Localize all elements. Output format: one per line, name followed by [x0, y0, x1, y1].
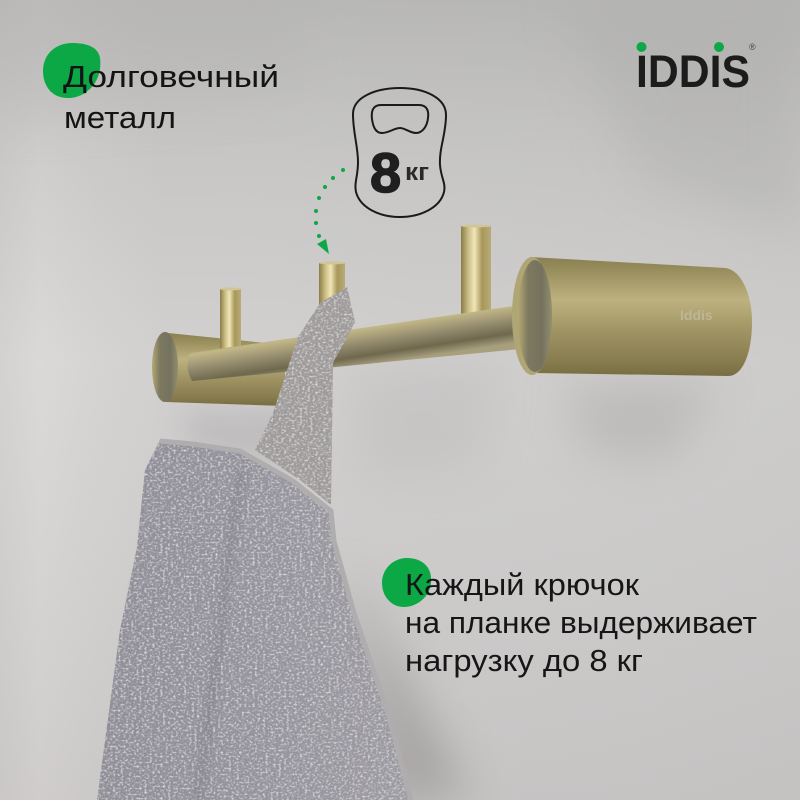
left wall mount	[152, 332, 285, 406]
towel	[97, 287, 411, 800]
towel loop strip	[255, 287, 355, 505]
logo: IDDIS: ®	[749, 42, 756, 52]
right hook peg	[461, 224, 491, 322]
right wall mount	[512, 257, 752, 376]
logo: IDDIS: IDDIS	[636, 46, 750, 97]
arrow: dotted curve to hook	[314, 168, 345, 254]
heading: durable metal: Долговечный	[63, 59, 279, 94]
heading: durable metal	[43, 43, 279, 135]
heading: durable metal: металл	[64, 100, 176, 135]
terry towel body	[97, 440, 410, 800]
horizontal bar	[187, 305, 520, 381]
green blob	[382, 558, 431, 607]
icon: kettlebell 8 kg: 8	[370, 141, 401, 204]
towel fold	[198, 470, 243, 800]
callout: load per hook	[382, 558, 757, 678]
callout: load per hook: нагрузку до 8 кг	[405, 643, 643, 678]
green blob	[43, 43, 100, 98]
hook rail	[152, 224, 752, 406]
callout: load per hook: на планке выдерживает	[405, 605, 757, 640]
icon: kettlebell 8 kg: кг	[405, 159, 429, 186]
engraved brand mark: Iddis	[680, 307, 713, 323]
callout: load per hook: Каждый крючок	[405, 567, 639, 602]
middle hook peg	[319, 262, 345, 313]
icon: kettlebell 8 kg	[353, 88, 446, 217]
left hook peg	[220, 288, 241, 357]
towel edge trim	[160, 441, 411, 800]
